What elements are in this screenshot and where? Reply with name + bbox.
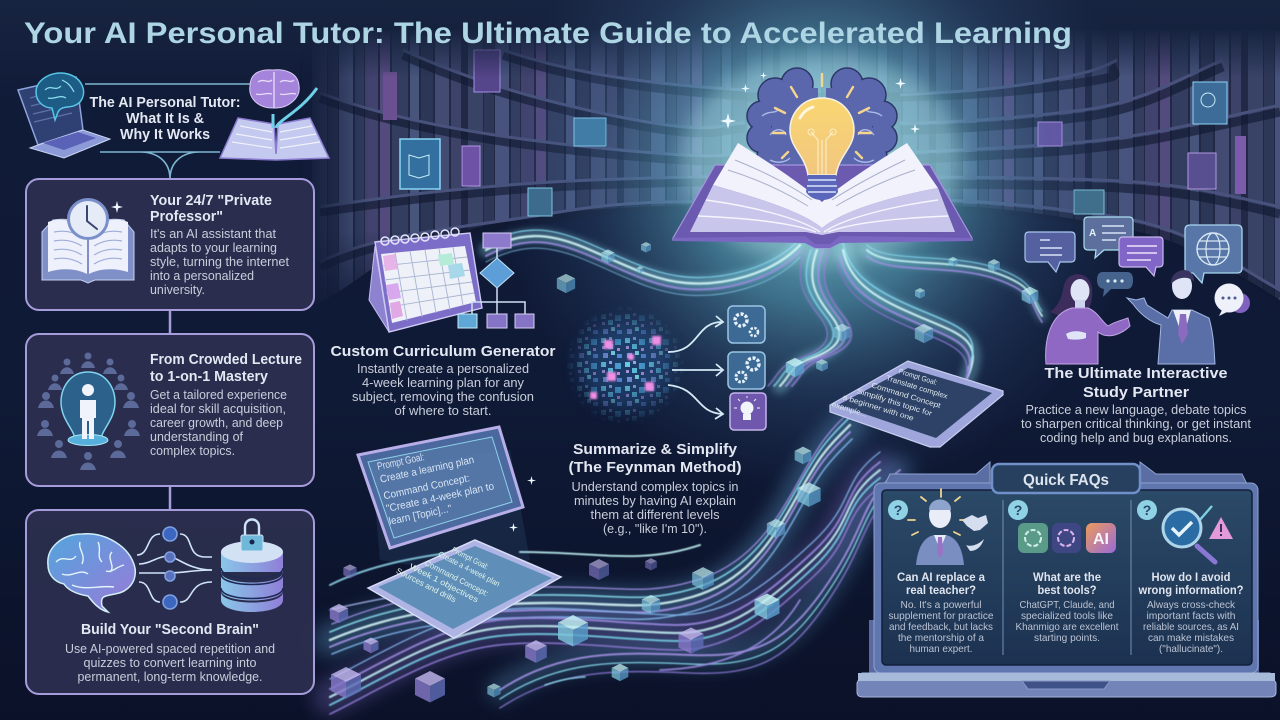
text: section heading: The AI Personal Tutor: [90, 94, 240, 111]
text: second brain: quizzes to convert learning into [84, 656, 257, 670]
icon: connecting nodes [137, 527, 212, 609]
text: curriculum generator [330, 343, 556, 418]
text: best tools [1016, 570, 1119, 644]
text: summarize and simplify: minutes by having AI explain [574, 494, 736, 508]
text: wrong information: can make mistakes [1148, 632, 1234, 644]
text: curriculum generator: Instantly create a personalized [357, 362, 529, 376]
text: study partner: Study Partner [1083, 384, 1189, 401]
icon: question badge: ? [894, 502, 902, 518]
text: summarize and simplify [568, 441, 742, 536]
panel: crowded lecture [26, 334, 314, 486]
icon: teacher and handshake [908, 489, 988, 565]
text: crowded lecture: From Crowded Lecture [150, 351, 302, 368]
text: wrong information: wrong information? [1138, 583, 1244, 597]
text: private professor: Professor" [150, 208, 223, 225]
prompt card: upper right tablet: Prompt Goal: [898, 367, 938, 387]
icon: idea tile [730, 393, 766, 430]
text: crowded lecture: to 1-on-1 Mastery [150, 368, 269, 385]
text: replace a teacher: human expert. [910, 643, 972, 655]
icon: man [1127, 270, 1215, 364]
prompt card: floating: Command Concept: [382, 472, 471, 502]
text: replace a teacher [888, 570, 994, 655]
prompt card: upper right tablet: Translate complex [885, 373, 949, 401]
icon: question badge [1008, 500, 1028, 520]
icon: woman [1046, 274, 1130, 364]
text: private professor: It's an AI assistant that [150, 227, 277, 241]
text: crowded lecture [150, 351, 302, 458]
text: replace a teacher: real teacher? [906, 583, 976, 597]
text: section heading: What It Is & [126, 110, 204, 127]
text: wrong information: ("hallucinate"). [1159, 643, 1223, 655]
prompt card: lower tablet: Week 1 objectives [408, 562, 480, 604]
FAQ column: wrong information [1137, 500, 1244, 655]
icon: book with clock [42, 200, 134, 283]
prompt card: floating [358, 427, 523, 548]
text: summarize and simplify: Understand complex topics in [572, 480, 739, 494]
text: section heading: Why It Works [120, 126, 210, 143]
FAQ column: best tools [1008, 500, 1119, 644]
text: summarize and simplify: them at different levels [590, 508, 720, 522]
icon: gears tile two [728, 352, 765, 389]
floating prompt panels [358, 351, 1003, 638]
text: private professor: university. [150, 283, 205, 297]
icon: AI tool chips [1018, 523, 1116, 553]
text: summarize and simplify: (The Feynman Method) [568, 459, 742, 476]
icon: brain [48, 534, 135, 612]
text: best tools: What are the [1033, 570, 1101, 584]
text: private professor: style, turning the internet [150, 255, 290, 269]
prompt card: floating: "Create a 4-week plan to [385, 480, 495, 515]
prompt card: lower tablet: Prompt Goal: [450, 545, 490, 571]
icon: question badge: ? [1143, 502, 1151, 518]
prompt card: floating: learn [Topic]..." [388, 503, 453, 528]
prompt card: upper right tablet: Simplify this topic for [856, 386, 934, 418]
panel: private professor [26, 179, 314, 310]
prompt card: upper right tablet: Command Concept [870, 380, 943, 410]
text: crowded lecture: ideal for skill acquisition, [150, 402, 286, 416]
text: replace a teacher: the mentorship of a [898, 632, 984, 644]
icon: brain behind bulb [747, 68, 897, 177]
title: Your AI Personal Tutor: The Ultimate Guide to Accelerated Learning [24, 17, 1072, 50]
prompt card: lower tablet [368, 527, 561, 638]
central glow and edge fades [300, 0, 1280, 560]
icon: gears tile [728, 306, 765, 343]
icon: AI tool chips: AI [1093, 531, 1109, 548]
text: study partner: coding help and bug explanations. [1040, 431, 1232, 445]
curriculum generator [330, 228, 556, 418]
text: crowded lecture: understanding of [150, 430, 244, 444]
study partner [1021, 217, 1252, 445]
text: wrong information: How do I avoid [1152, 570, 1230, 584]
bookshelves: right [745, 60, 1280, 297]
hero: open book with brain and light bulb [673, 55, 972, 265]
text: wrong information [1138, 570, 1244, 655]
icon: magnifier and warning [1163, 506, 1233, 562]
icon: question badge [1137, 500, 1157, 520]
icon: calendar [369, 228, 482, 332]
text: crowded lecture: career growth, and deep [150, 416, 283, 430]
text: summarize and simplify: Summarize & Simplify [573, 441, 738, 458]
text: wrong information: reliable sources, as AI [1143, 621, 1239, 633]
text: wrong information: Always cross-check [1147, 599, 1236, 611]
summarize and simplify [563, 303, 766, 536]
text: curriculum generator: subject, removing the confusion [352, 390, 534, 404]
text: private professor [150, 192, 290, 297]
text: second brain: permanent, long-term knowledge. [78, 670, 262, 684]
bookshelves: left [320, 50, 745, 267]
icon: laptop with teal brain [18, 73, 110, 158]
panel: second brain [26, 510, 314, 694]
icon: data particle cloud [568, 308, 682, 422]
text: replace a teacher: supplement for practice [888, 610, 994, 622]
text: replace a teacher: and feedback, but lacks [889, 621, 993, 633]
text: study partner: The Ultimate Interactive [1044, 365, 1228, 382]
laptop body [857, 462, 1276, 697]
icon: question badge: ? [1014, 502, 1022, 518]
icon: database with padlock [221, 520, 283, 612]
text: private professor: Your 24/7 "Private [150, 192, 272, 209]
text: summarize and simplify: (e.g., "like I'm 10"). [603, 522, 707, 536]
text: best tools: specialized tools like [1021, 610, 1113, 622]
text: wrong information: important facts with [1146, 610, 1236, 622]
text: best tools: ChatGPT, Claude, and [1020, 599, 1115, 611]
icon: light bulb [790, 98, 854, 200]
text: best tools: Khanmigo are excellent [1016, 621, 1119, 633]
text: study partner: Practice a new language, debate topics [1026, 403, 1246, 417]
text: crowded lecture: complex topics. [150, 444, 235, 458]
icon: book growing a brain [220, 70, 329, 160]
light beam [372, 450, 530, 575]
icon: speech bubbles [1025, 217, 1250, 316]
prompt card: upper right tablet: a beginner with one [842, 392, 915, 423]
prompt card: lower tablet: Sources and drills [395, 566, 457, 604]
icon: person in glass bubble among crowd [37, 352, 140, 470]
text: curriculum generator: of where to start. [394, 404, 492, 418]
text: private professor: adapts to your learning [150, 241, 277, 255]
tab: Quick FAQs [992, 464, 1140, 493]
text: study partner: to sharpen critical thinking, or get instant [1021, 417, 1252, 431]
prompt card: floating: Prompt Goal: [376, 451, 426, 473]
text: private professor: into a personalized [150, 269, 254, 283]
text: section heading [90, 94, 240, 143]
text: replace a teacher: No. It's a powerful [900, 599, 982, 611]
prompt card: upper right tablet [830, 351, 1003, 447]
text: second brain: Build Your "Second Brain" [81, 621, 259, 638]
prompt card: upper right tablet: example... [831, 400, 868, 419]
icon: flow chart [458, 233, 534, 328]
text: best tools: starting points. [1034, 632, 1100, 644]
text: curriculum generator: 4-week learning plan for any [362, 376, 525, 390]
FAQ column: replace a teacher [888, 489, 994, 655]
tab: Quick FAQs: Quick FAQs [1023, 472, 1109, 489]
knowledge flow ribbons [330, 230, 1042, 714]
icon: speech bubbles: A [1089, 228, 1096, 239]
prompt card: lower tablet: Create a 4-week plan [437, 550, 501, 588]
text: crowded lecture: Get a tailored experience [150, 388, 287, 402]
text: curriculum generator: Custom Curriculum Generator [330, 343, 556, 360]
text: second brain: Use AI-powered spaced repetition and [65, 642, 275, 656]
flow data cubes [330, 242, 1038, 702]
icon: question badge [888, 500, 908, 520]
text: replace a teacher: Can AI replace a [897, 570, 985, 584]
icon: arrows to processing tiles [668, 316, 723, 419]
laptop panel: quick FAQs [857, 462, 1276, 697]
icon: open book [673, 143, 972, 248]
text: second brain [65, 621, 275, 684]
prompt card: floating: Create a learning plan [379, 454, 475, 486]
prompt card: lower tablet: Command Concept: [423, 558, 490, 598]
header: what it is [18, 70, 329, 179]
text: study partner [1021, 365, 1252, 445]
text: best tools: best tools? [1038, 583, 1096, 597]
